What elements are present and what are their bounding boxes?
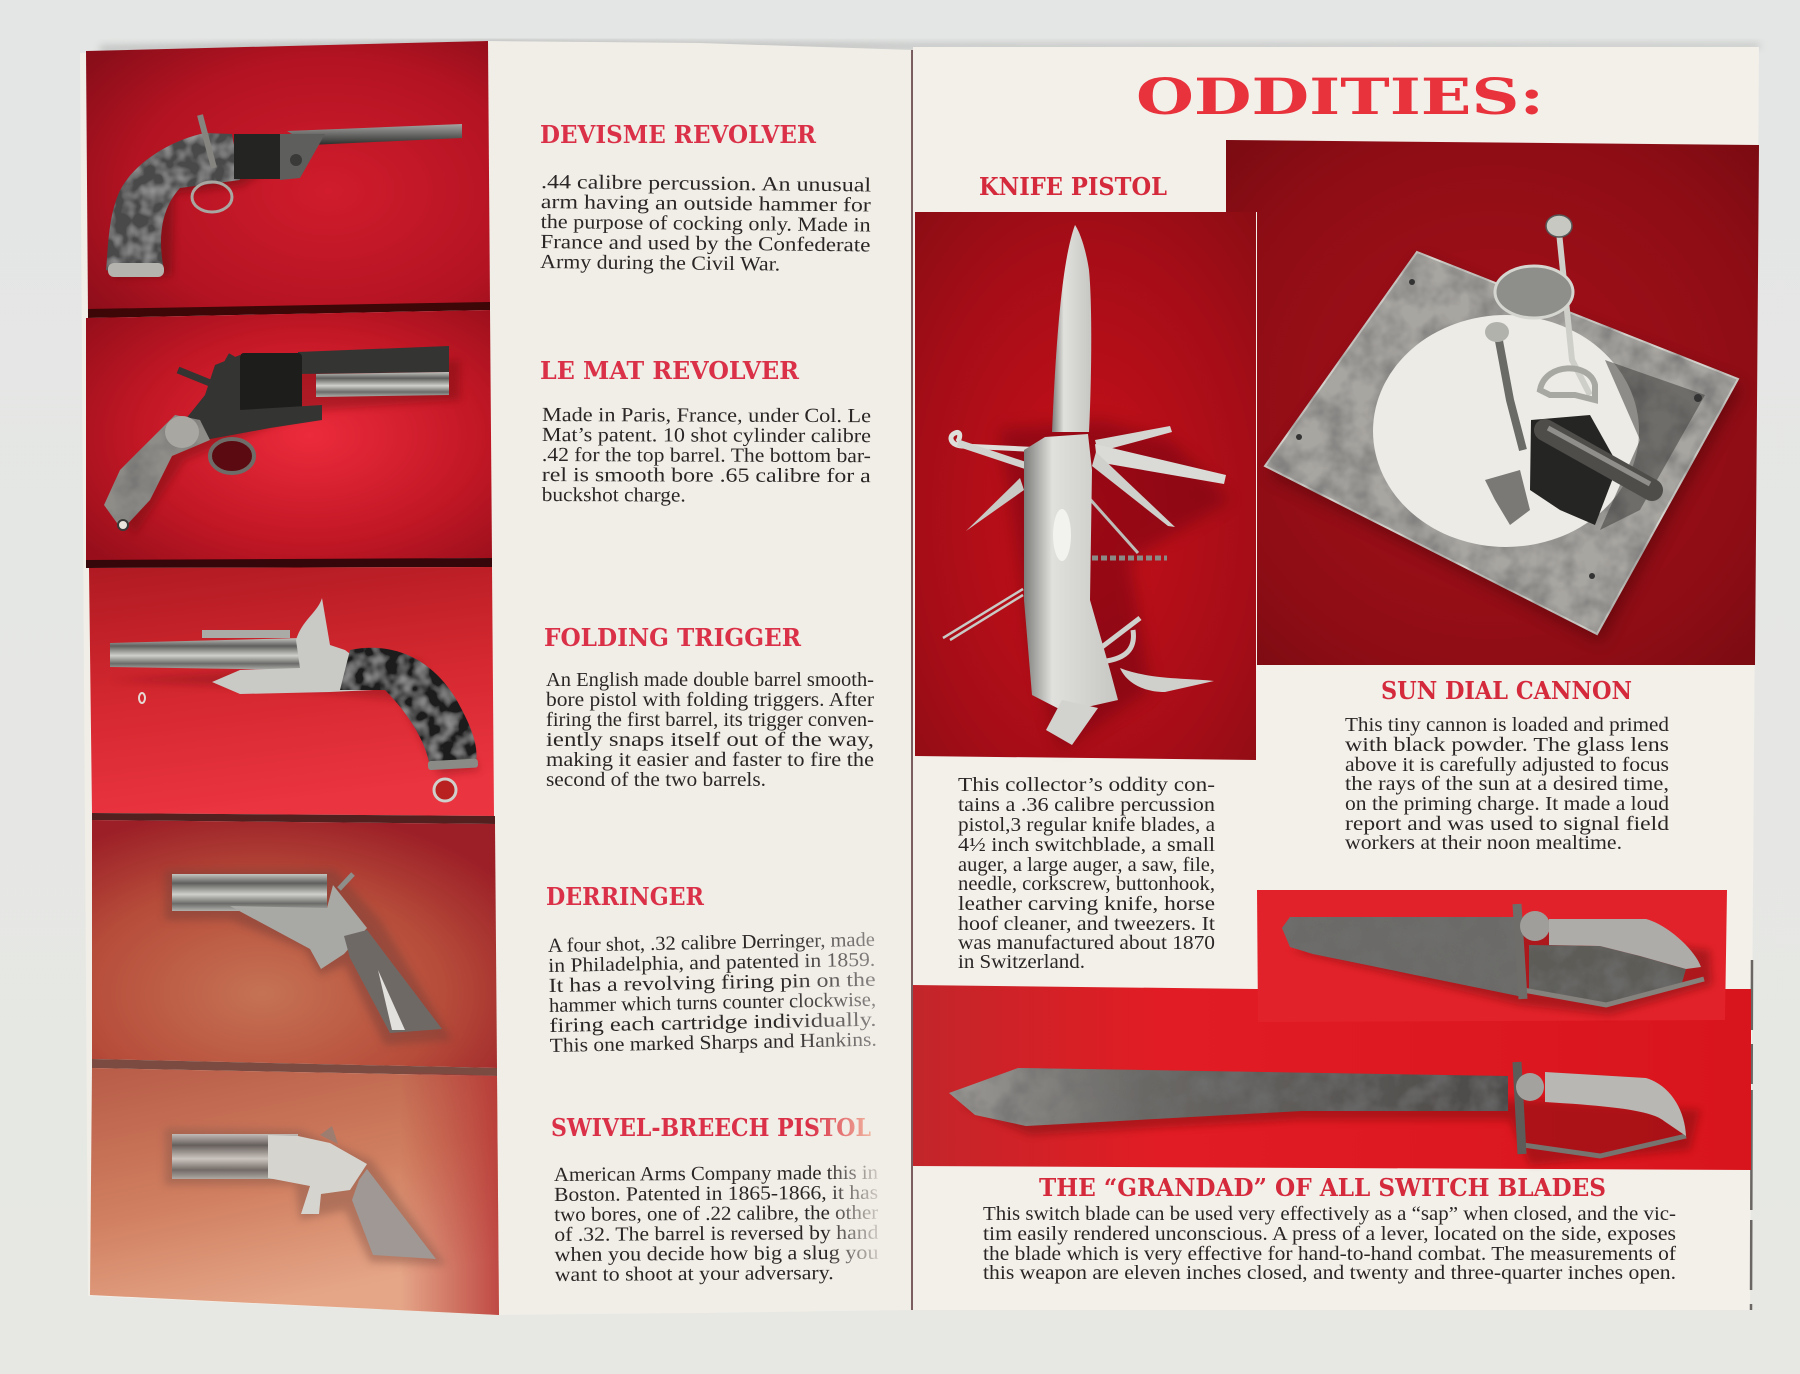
text block: The Grandad: the blade which is very effective for hand-to-hand combat. The measurements of [983,1243,1676,1265]
text block: Sun Dial Cannon: on the priming charge. It made a loud [1345,793,1669,815]
text block: Swivel-Breech Pistol: of .32. The barrel is reversed by hand [554,1222,878,1246]
left page [80,41,912,1315]
text block: Folding Trigger: firing the first barrel, its trigger conven- [546,709,874,731]
text block: Folding Trigger [546,669,874,791]
text block: Devisme Revolver: .44 calibre percussion. An unusual [541,171,872,196]
text block: Sun Dial Cannon: report and was used to signal field [1345,813,1669,835]
text block: Knife Pistol: hoof cleaner, and tweezers. It [958,913,1215,935]
text block: Derringer: This one marked Sharps and Hankins. [550,1029,877,1057]
heading: Sun Dial Cannon: SUN DIAL CANNON [1381,676,1632,705]
panel: derringer photo [92,820,497,1068]
text block: Sun Dial Cannon: This tiny cannon is loaded and primed [1345,714,1669,736]
text block: Swivel-Breech Pistol [554,1162,879,1286]
spine shadow [911,50,914,1310]
text block: Folding Trigger: bore pistol with folding triggers. After [546,689,874,711]
text block: Devisme Revolver: France and used by the Confederate [540,231,871,256]
icon: closed switch blade [1282,904,1712,1015]
text block: Folding Trigger: iently snaps itself out of the way, [546,729,874,751]
text block: Le Mat Revolver: .42 for the top barrel. The bottom bar- [542,444,871,467]
right page [913,47,1759,1310]
text block: Derringer: It has a revolving firing pin on the [548,969,876,997]
text block: Folding Trigger: An English made double barrel smooth- [546,669,874,691]
text block: Sun Dial Cannon [1345,714,1669,854]
text block: Swivel-Breech Pistol: Boston. Patented in 1865-1866, it has [554,1182,878,1206]
text block: The Grandad: tim easily rendered unconscious. A press of a lever, located on the side, exposes [983,1223,1676,1245]
panel: open switch blade photo [913,985,1751,1170]
icon: folding trigger pistol [110,598,480,801]
panel: folding trigger photo [89,567,494,816]
icon: swivel-breech pistol [165,1126,446,1265]
heading: Devisme Revolver: DEVISME REVOLVER [540,120,817,149]
text block: The Grandad [983,1203,1676,1284]
text block: Devisme Revolver: Army during the Civil War. [540,251,780,276]
text block: Swivel-Breech Pistol: want to shoot at your adversary. [555,1262,834,1286]
divider bar [92,1059,497,1076]
text block: The Grandad: this weapon are eleven inches closed, and twenty and three-quarter inches open. [983,1262,1676,1284]
panel: closed switch blade photo [1257,890,1727,1022]
panel: Devisme revolver photo [86,41,490,314]
text block: Knife Pistol: in Switzerland. [958,951,1085,973]
text block: Swivel-Breech Pistol: when you decide how big a slug you [554,1242,879,1266]
text block: Derringer: firing each cartridge individually. [549,1009,877,1037]
panel: knife pistol photo [915,212,1256,760]
panel: Le Mat revolver photo [86,310,492,561]
text block: Le Mat Revolver: Made in Paris, France, under Col. Le [542,404,871,427]
heading: Le Mat Revolver: LE MAT REVOLVER [540,356,800,385]
text block: Le Mat Revolver [542,404,871,507]
heading: Derringer: DERRINGER [546,882,705,911]
text block: Knife Pistol: This collector’s oddity con- [958,774,1215,796]
text block: The Grandad: This switch blade can be used very effectively as a “sap” when closed, and the vic- [983,1203,1676,1225]
text block: Folding Trigger: making it easier and faster to fire the [546,749,874,771]
text block: Sun Dial Cannon: the rays of the sun at a desired time, [1345,773,1669,795]
text block: Knife Pistol: needle, corkscrew, buttonhook, [958,873,1215,895]
icon: open switch blade [949,1062,1700,1165]
divider bar [86,558,492,568]
heading: Swivel-Breech Pistol: SWIVEL-BREECH PISTOL [551,1113,871,1142]
text block: Devisme Revolver [540,171,872,276]
text block: Knife Pistol: auger, a large auger, a saw, file, [958,854,1215,876]
heading: Folding Trigger: FOLDING TRIGGER [544,623,802,652]
heading: Knife Pistol: KNIFE PISTOL [979,172,1167,201]
divider bar [92,813,495,824]
text block: Swivel-Breech Pistol: two bores, one of .22 calibre, the other [554,1202,879,1226]
text block: Knife Pistol [958,774,1215,973]
icon: knife pistol multi-tool [943,225,1230,750]
icon: Le Mat revolver [104,346,460,535]
panel: swivel-breech photo [90,1068,499,1315]
text block: Derringer [548,929,877,1057]
title: ODDITIES: [1136,67,1544,126]
text block: Devisme Revolver: the purpose of cocking only. Made in [541,211,871,236]
icon: Devisme revolver [106,115,462,278]
text block: Knife Pistol: pistol,3 regular knife blades, a [958,814,1215,836]
text block: Le Mat Revolver: Mat’s patent. 10 shot cylinder calibre [542,424,871,447]
text block: Derringer: hammer which turns counter clockwise, [549,989,876,1017]
text block: Knife Pistol: leather carving knife, horse [958,893,1215,915]
text block: Le Mat Revolver: rel is smooth bore .65 calibre for a [542,464,871,487]
divider bar [88,302,490,318]
text block: Sun Dial Cannon: workers at their noon mealtime. [1345,832,1622,854]
text block: Knife Pistol: 4½ inch switchblade, a small [958,834,1215,856]
icon: derringer [165,870,452,1045]
text block: Sun Dial Cannon: above it is carefully adjusted to focus [1345,754,1669,776]
text block: Sun Dial Cannon: with black powder. The glass lens [1345,734,1669,756]
text block: Derringer: A four shot, .32 calibre Derringer, made [548,929,875,957]
icon: sun dial cannon [1265,215,1742,642]
page stack edge [1751,960,1752,1310]
text block: Folding Trigger: second of the two barrels. [546,769,766,791]
text block: Knife Pistol: was manufactured about 1870 [958,932,1215,954]
text block: Swivel-Breech Pistol: American Arms Company made this in [554,1162,878,1186]
text block: Le Mat Revolver: buckshot charge. [542,484,686,507]
text block: Devisme Revolver: arm having an outside hammer for [541,191,871,216]
panel: sun dial cannon photo [1226,140,1759,665]
text block: Derringer: in Philadelphia, and patented in 1859. [548,949,875,977]
text block: Knife Pistol: tains a .36 calibre percussion [958,794,1215,816]
heading: The Grandad of all switch blades: THE “GRANDAD” OF ALL SWITCH BLADES [1039,1173,1606,1202]
